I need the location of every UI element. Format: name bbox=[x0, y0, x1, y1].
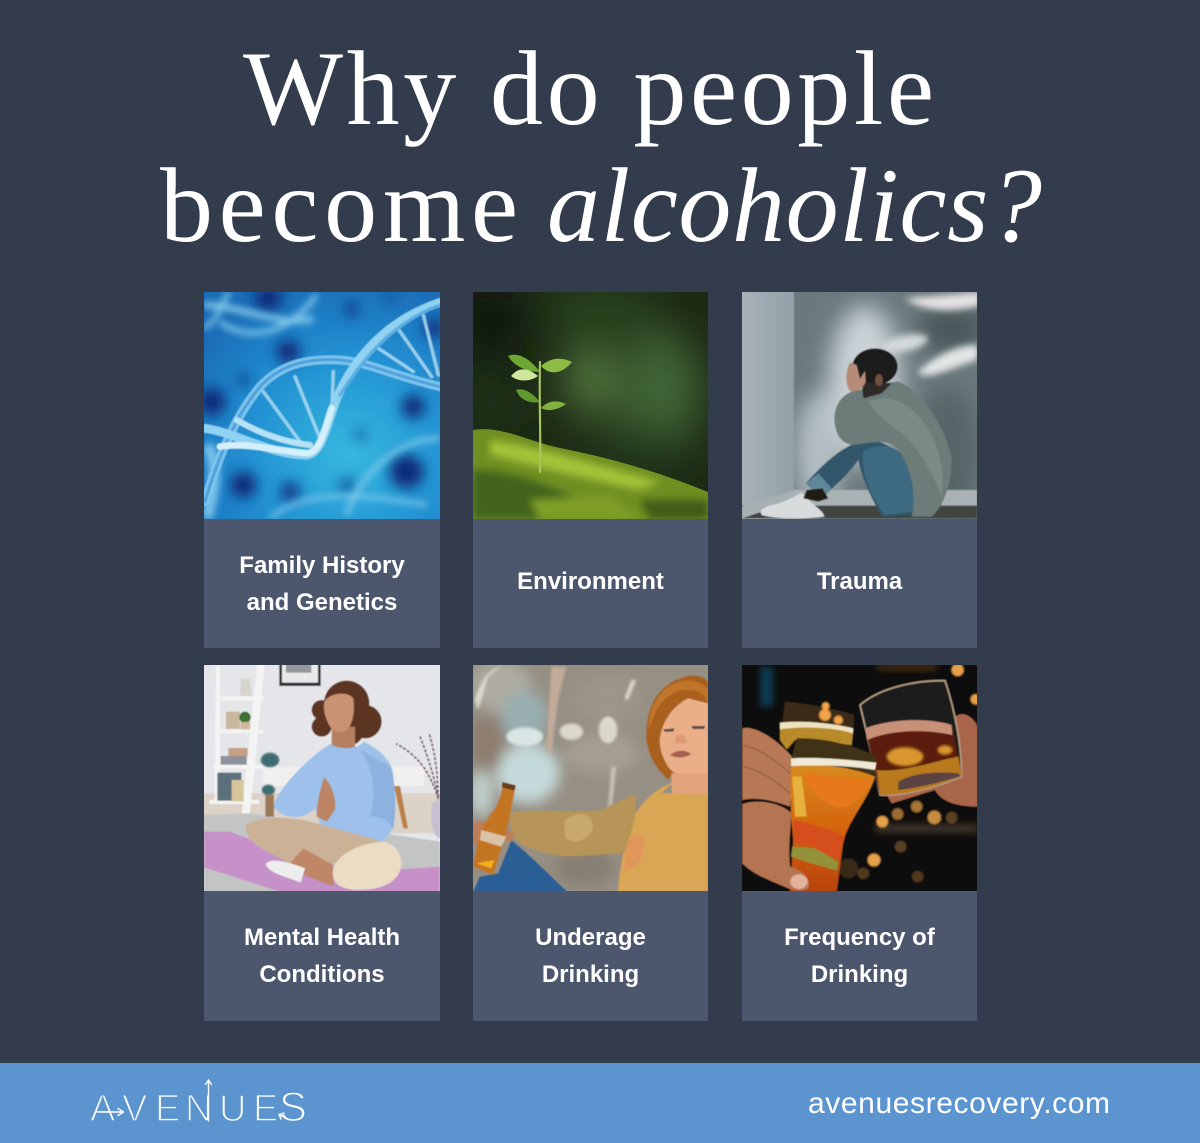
sweater bbox=[834, 382, 952, 517]
whisky glass bbox=[860, 681, 962, 795]
bottle bbox=[473, 783, 516, 875]
label background bbox=[204, 891, 440, 1021]
photo: boy with beer bottle bbox=[473, 665, 708, 891]
mat bbox=[204, 832, 440, 892]
neck bbox=[332, 727, 355, 748]
title: become bbox=[160, 147, 518, 264]
neck bbox=[671, 773, 708, 795]
title: Why do people bbox=[243, 30, 934, 147]
label background bbox=[204, 519, 440, 648]
panel: frequency of drinking bbox=[735, 660, 985, 1021]
head bbox=[852, 348, 898, 385]
label background bbox=[473, 519, 708, 648]
face bbox=[324, 694, 354, 732]
label text: Family History bbox=[239, 552, 405, 579]
hand left top bbox=[742, 728, 793, 807]
knee bbox=[333, 842, 401, 890]
label text: and Genetics bbox=[247, 589, 397, 616]
hand right bbox=[885, 714, 978, 807]
shelf bbox=[209, 663, 265, 813]
front beer glass bbox=[790, 738, 877, 892]
photo: woman meditating bbox=[204, 665, 440, 891]
plant bbox=[261, 753, 279, 795]
title bbox=[160, 30, 1042, 264]
logo: Avenues: AVENUES bbox=[90, 1083, 307, 1130]
hand bbox=[846, 362, 866, 391]
panel: family history and genetics bbox=[198, 285, 450, 648]
face bbox=[660, 698, 708, 777]
label text: Drinking bbox=[542, 961, 639, 988]
panel: environment bbox=[473, 292, 708, 648]
jeans bbox=[806, 440, 917, 517]
sweater bbox=[274, 742, 395, 842]
back beer glass bbox=[780, 702, 854, 750]
label background bbox=[742, 891, 977, 1021]
photo: man sitting in corner bbox=[742, 292, 977, 519]
table bbox=[263, 767, 424, 786]
label background bbox=[742, 519, 977, 648]
socks bbox=[266, 861, 305, 883]
photo: seedling on moss bbox=[473, 292, 708, 519]
sleeve bbox=[510, 795, 636, 856]
footer bar bbox=[0, 1063, 1200, 1143]
label background bbox=[473, 891, 708, 1021]
label text: Frequency of bbox=[784, 924, 936, 951]
shoe bbox=[761, 492, 824, 518]
hand left bottom bbox=[742, 802, 809, 891]
panel: mental health conditions bbox=[200, 660, 450, 1021]
panel: trauma bbox=[735, 285, 985, 648]
hands bbox=[317, 777, 335, 822]
panel: underage drinking bbox=[468, 660, 718, 1021]
trousers bbox=[246, 818, 383, 864]
label text: Underage bbox=[535, 924, 646, 951]
label text: Mental Health bbox=[244, 924, 400, 951]
label text: Environment bbox=[517, 568, 664, 595]
jeans bbox=[473, 840, 567, 892]
label text: Drinking bbox=[811, 961, 908, 988]
hand bbox=[473, 822, 515, 847]
label text: Trauma bbox=[817, 568, 903, 595]
back hair bbox=[646, 676, 708, 780]
title: alcoholics? bbox=[547, 147, 1042, 264]
photo: beer glasses toasting bbox=[742, 665, 977, 891]
vase bbox=[431, 799, 440, 838]
bokeh lights bbox=[838, 664, 981, 883]
photo: DNA helix bbox=[204, 292, 440, 519]
label text: Conditions bbox=[259, 961, 385, 988]
hair bbox=[312, 681, 382, 745]
sweater body bbox=[618, 783, 708, 892]
picture bbox=[279, 663, 321, 686]
website url: avenuesrecovery.com bbox=[808, 1087, 1110, 1120]
shin bbox=[290, 848, 333, 887]
